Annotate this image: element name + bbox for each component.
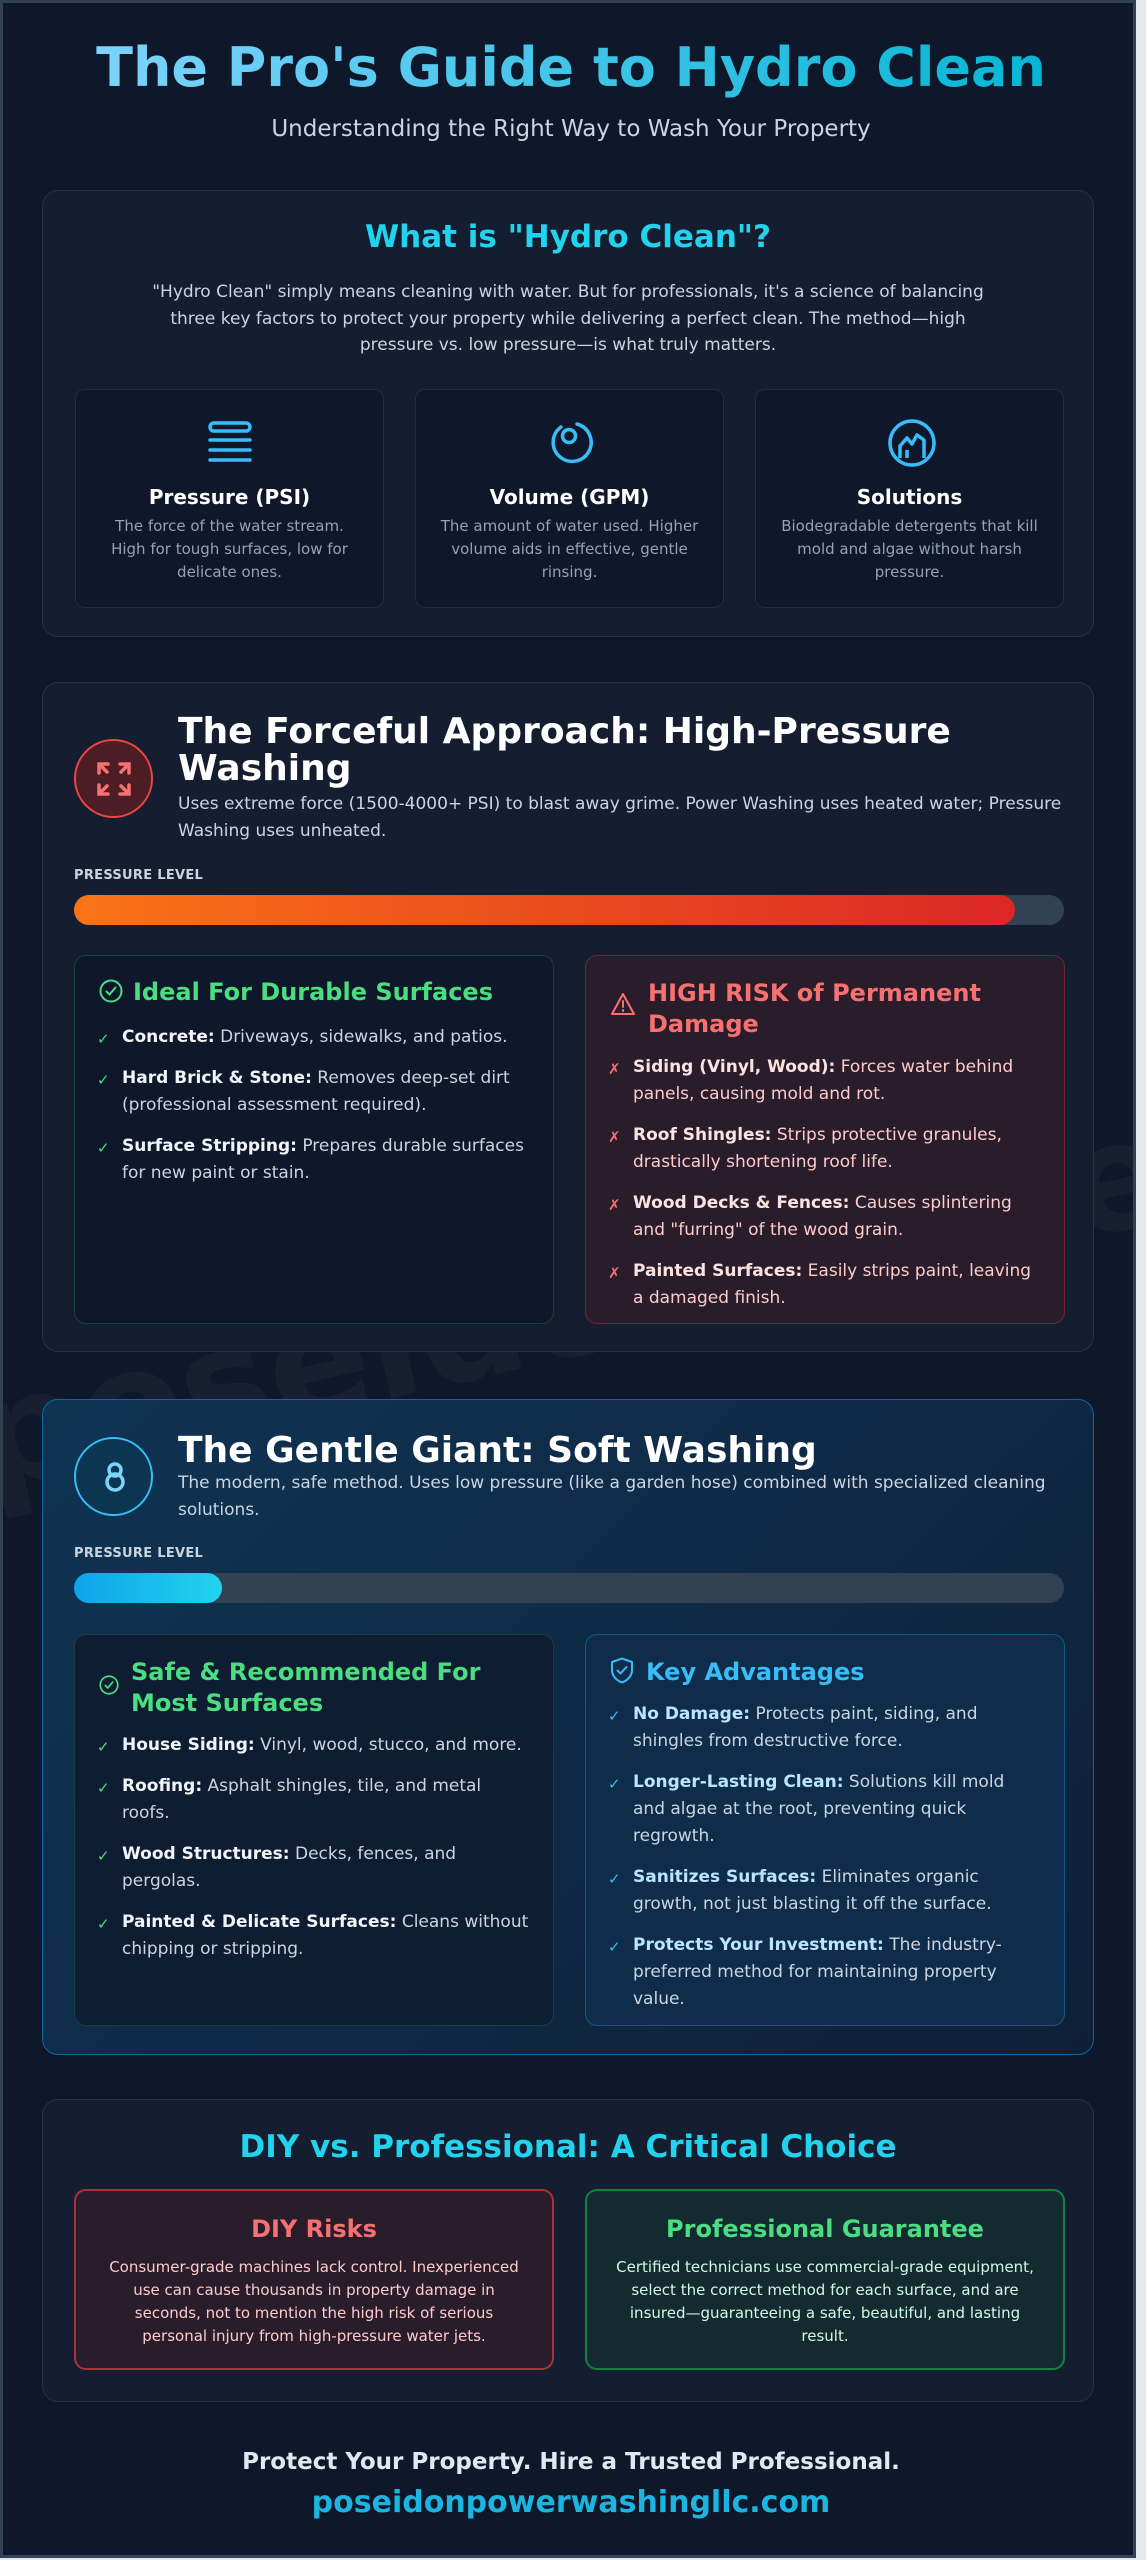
list: ✗	[608, 1128, 621, 1146]
card: volume	[415, 389, 724, 608]
check icon	[99, 1675, 119, 1695]
list: Protects Your Investment: The industry-preferred method for maintaining property value.	[633, 1935, 1002, 2009]
list: ✗	[608, 1196, 621, 1214]
heading: HIGH RISK of Permanent Damage	[648, 979, 981, 1038]
panel: soft washing	[42, 1399, 1094, 2055]
panel: key advantages	[585, 1634, 1065, 2026]
text: Certified technicians use commercial-grade equipment, select the correct method for each surface, and are insured—guaranteeing a safe, beautiful, and lasting result.	[616, 2258, 1034, 2345]
icon: volume	[551, 422, 593, 464]
card: solutions	[755, 389, 1064, 608]
description: Uses extreme force (1500-4000+ PSI) to blast away grime. Power Washing uses heated water; Pressure Washing uses unheated.	[178, 794, 1061, 841]
list: Concrete: Driveways, sidewalks, and patios.	[122, 1027, 508, 1047]
list: ✗	[608, 1264, 621, 1282]
list: ✓	[97, 1738, 110, 1756]
footer tagline: Protect Your Property. Hire a Trusted Professional.	[242, 2449, 900, 2475]
title: DIY Risks	[251, 2215, 377, 2243]
card: pressure	[75, 389, 384, 608]
text: Consumer-grade machines lack control. Inexperienced use can cause thousands in property damage in seconds, not to mention the high risk of serious personal injury from high-pressure water jets.	[109, 2258, 519, 2345]
list: Sanitizes Surfaces: Eliminates organic growth, not just blasting it off the surface.	[633, 1867, 992, 1914]
card title: Pressure (PSI)	[149, 485, 310, 509]
list: Siding (Vinyl, Wood): Forces water behind panels, causing mold and rot.	[633, 1057, 1013, 1104]
heading: Key Advantages	[646, 1658, 865, 1686]
icon: solutions	[888, 419, 936, 467]
panel: diy vs professional	[42, 2099, 1094, 2402]
subtitle: Understanding the Right Way to Wash Your Property	[271, 116, 871, 142]
heading: Safe & Recommended For Most Surfaces	[131, 1658, 480, 1717]
list	[608, 1057, 1031, 1308]
list: ✓	[97, 1779, 110, 1797]
list	[608, 1704, 1004, 2009]
list: House Siding: Vinyl, wood, stucco, and more.	[122, 1735, 522, 1755]
panel: high risk	[585, 955, 1065, 1324]
card title: Volume (GPM)	[490, 485, 649, 509]
icon: expand arrows	[74, 739, 153, 818]
icon: pressure	[208, 421, 252, 462]
list: Longer-Lasting Clean: Solutions kill mold and algae at the root, preventing quick regrowth.	[633, 1772, 1004, 1846]
heading: DIY vs. Professional: A Critical Choice	[240, 2129, 896, 2165]
description: The modern, safe method. Uses low pressure (like a garden hose) combined with specialized cleaning solutions.	[178, 1473, 1046, 1520]
list: Painted & Delicate Surfaces: Cleans without chipping or stripping.	[122, 1912, 528, 1959]
list: ✓	[608, 1938, 621, 1956]
list: Surface Stripping: Prepares durable surfaces for new paint or stain.	[122, 1136, 524, 1183]
card text: Biodegradable detergents that kill mold and algae without harsh pressure.	[781, 517, 1038, 581]
list: ✓	[608, 1775, 621, 1793]
label: PRESSURE LEVEL	[74, 1546, 203, 1561]
list: ✓	[97, 1071, 110, 1089]
panel: ideal for	[74, 955, 554, 1324]
card title: Solutions	[857, 485, 962, 509]
list: Painted Surfaces: Easily strips paint, leaving a damaged finish.	[633, 1261, 1031, 1308]
list: ✓	[97, 1139, 110, 1157]
footer url: poseidonpowerwashingllc.com	[312, 2485, 830, 2520]
list	[97, 1735, 528, 1959]
panel: safe for	[74, 1634, 554, 2026]
list: ✗	[608, 1060, 621, 1078]
intro text: "Hydro Clean" simply means cleaning with water. But for professionals, it's a science of balancing three key factors to protect your property while delivering a perfect clean. The method—high pressure vs. low pressure—is what truly matters.	[152, 282, 984, 355]
title: Professional Guarantee	[666, 2215, 984, 2243]
heading: The Forceful Approach: High-Pressure Washing	[178, 711, 951, 789]
list: Hard Brick & Stone: Removes deep-set dirt (professional assessment required).	[122, 1068, 510, 1115]
list: ✓	[608, 1870, 621, 1888]
heading: The Gentle Giant: Soft Washing	[178, 1430, 817, 1471]
list: ✓	[97, 1030, 110, 1048]
heading: What is "Hydro Clean"?	[365, 219, 771, 255]
title: The Pro's Guide to Hydro Clean	[96, 36, 1046, 99]
card: diy risks	[74, 2189, 554, 2370]
list: No Damage: Protects paint, siding, and shingles from destructive force.	[633, 1704, 978, 1751]
bar chart: pressure level low	[74, 1573, 1064, 1603]
bar chart: pressure level high	[74, 895, 1064, 925]
list: Roofing: Asphalt shingles, tile, and metal roofs.	[122, 1776, 481, 1823]
icon: soft wash	[74, 1437, 153, 1516]
card text: The force of the water stream. High for tough surfaces, low for delicate ones.	[111, 517, 348, 581]
heading: Ideal For Durable Surfaces	[133, 978, 493, 1006]
card text: The amount of water used. Higher volume aids in effective, gentle rinsing.	[441, 517, 698, 581]
label: PRESSURE LEVEL	[74, 868, 203, 883]
panel: what is hydro clean	[42, 190, 1094, 637]
list: ✓	[97, 1915, 110, 1933]
panel: high pressure	[42, 682, 1094, 1352]
warning icon	[611, 993, 635, 1015]
list: ✓	[608, 1707, 621, 1725]
list: Roof Shingles: Strips protective granules, drastically shortening roof life.	[633, 1125, 1002, 1172]
list: Wood Structures: Decks, fences, and pergolas.	[122, 1844, 456, 1891]
list: ✓	[97, 1847, 110, 1865]
card: professional guarantee	[585, 2189, 1065, 2370]
list: Wood Decks & Fences: Causes splintering and "furring" of the wood grain.	[633, 1193, 1012, 1240]
list	[97, 1027, 524, 1183]
